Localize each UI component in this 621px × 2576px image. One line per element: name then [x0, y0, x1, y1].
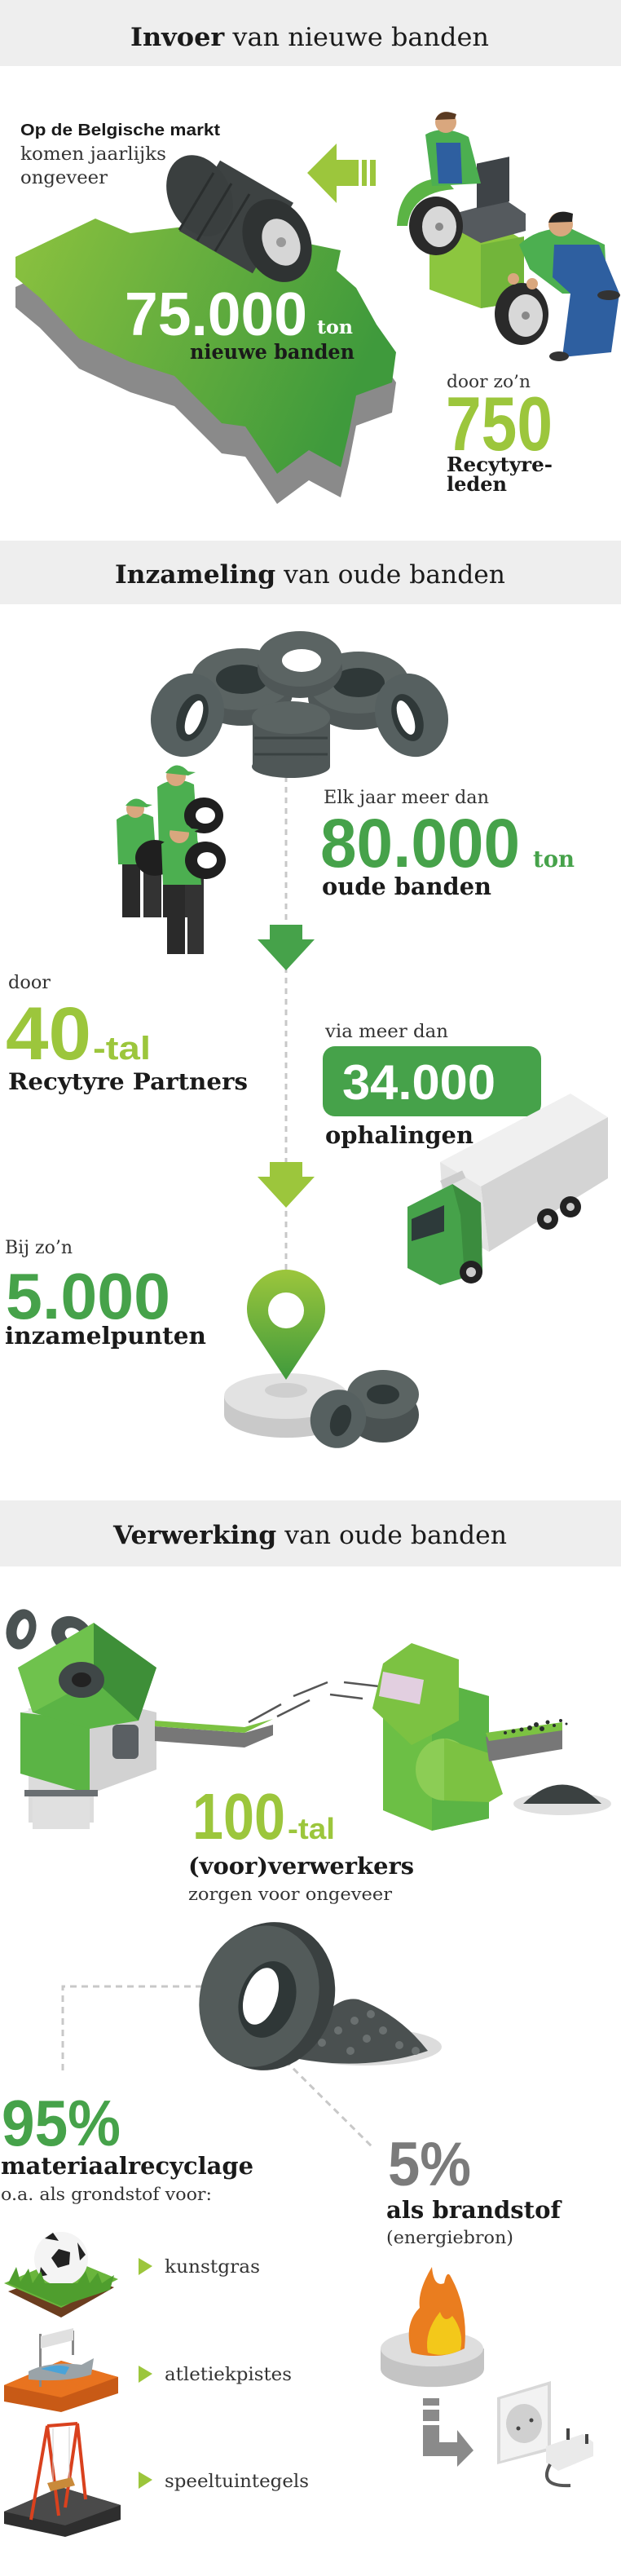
stat: 100-tal verwerkers: 100 [192, 1780, 285, 1853]
illustration: partners holding tires [117, 765, 226, 954]
header: verwerking: Verwerking van oude banden [112, 1521, 507, 1550]
bullet: kunstgras: kunstgras [165, 2257, 260, 2278]
icon: soccer ball on grass [4, 2232, 118, 2318]
icon: fire on platform [381, 2267, 484, 2387]
stat: 80.000 ton oude banden: 80.000 [320, 805, 520, 881]
stat: 40-tal Recytyre Partners: -tal [93, 1031, 151, 1067]
icon: power socket and plug [497, 2381, 593, 2485]
stat: 40-tal Recytyre Partners: door [8, 973, 51, 993]
text: door zo'n 750 Recytyre-leden: 750 [446, 381, 553, 466]
stat: 34.000 ophalingen: via meer dan [324, 1022, 448, 1042]
arrow down light green [258, 1162, 315, 1208]
intro text: ongeveer [20, 168, 108, 188]
illustration: shredder machine left [2, 1606, 156, 1829]
illustration: tire with granulate [181, 1905, 442, 2088]
stat: 40-tal Recytyre Partners: Recytyre Partners [8, 1068, 248, 1095]
tire stack on map [154, 144, 325, 294]
arrow: gray bent arrow [423, 2398, 473, 2467]
stat: 95% materiaalrecyclage: o.a. als grondstof voor: [1, 2185, 212, 2204]
tire pile [139, 631, 460, 778]
icon: athletics track [4, 2328, 118, 2412]
arrow left [307, 144, 376, 203]
stat: 5.000 inzamelpunten: inzamelpunten [5, 1322, 206, 1350]
illustration: granulator right [372, 1643, 611, 1831]
text: door zo'n 750 Recytyre-leden: leden [447, 472, 507, 496]
dashed connectors [63, 1986, 372, 2147]
stat: 80.000 ton oude banden: Elk jaar meer dan [324, 788, 489, 808]
header: invoer [0, 0, 621, 66]
map of Belgium [15, 219, 396, 504]
stat: 80.000 ton oude banden: ton [533, 846, 575, 873]
big number: 75.000 ton [125, 280, 355, 364]
stat: 40-tal Recytyre Partners [6, 973, 248, 1095]
stat: 34.000 ophalingen: 34.000 [342, 1055, 495, 1110]
header: inzameling: Inzameling van oude banden [115, 560, 505, 590]
text: door zo'n 750 Recytyre-leden [446, 372, 553, 496]
stat: 5.000 inzamelpunten: Bij zo’n [5, 1238, 73, 1258]
illustration: collection point with pin and tires [224, 1270, 419, 1456]
stat: 5.000 inzamelpunten [5, 1238, 206, 1350]
stat: 100-tal verwerkers: -tal [288, 1812, 335, 1845]
icon: playground swing [4, 2424, 121, 2537]
text: door zo'n 750 Recytyre-leden: door zo’n [447, 372, 531, 391]
stat: 5.000 inzamelpunten: 5.000 [6, 1260, 170, 1332]
illustration: truck [407, 1094, 608, 1285]
stat: 5% als brandstof: als brandstof [386, 2196, 563, 2224]
big number: 75.000 ton: ton [317, 316, 353, 338]
big number: 75.000 ton: nieuwe banden [190, 340, 355, 364]
stat: 95% materiaalrecyclage [1, 2087, 253, 2204]
intro text [20, 122, 220, 188]
header: inzameling [0, 541, 621, 604]
big number: 75.000 ton: 75.000 [125, 280, 307, 348]
arrow down dark green [258, 925, 315, 970]
illustration: mechanics with tire machine [397, 112, 620, 361]
intro text: komen jaarlijks [20, 144, 166, 165]
intro text: Op de Belgische markt [20, 122, 220, 139]
bullet: atletiekpistes: atletiekpistes [165, 2365, 292, 2385]
stat: 80.000 ton oude banden: oude banden [322, 873, 491, 900]
stat: 40-tal Recytyre Partners: 40 [6, 992, 91, 1076]
stat: 100-tal verwerkers: zorgen voor ongeveer [188, 1885, 393, 1904]
bullet: speeltuintegels: speeltuintegels [165, 2472, 309, 2492]
stat: 95% materiaalrecyclage: 95% [2, 2087, 121, 2159]
stat: 34.000 ophalingen [323, 1022, 541, 1149]
stat: 95% materiaalrecyclage: materiaalrecyclage [1, 2152, 253, 2180]
text: door zo'n 750 Recytyre-leden: Recytyre- [447, 453, 553, 476]
header: verwerking [0, 1500, 621, 1566]
header: invoer: Invoer van nieuwe banden [130, 23, 489, 52]
dashed flow line [285, 776, 287, 1272]
stat: 100-tal verwerkers: (voor)verwerkers [188, 1853, 414, 1880]
stat: 5% als brandstof [386, 2130, 563, 2247]
conveyor with strips [155, 1682, 379, 1748]
stat: 5% als brandstof: 5% [388, 2130, 471, 2199]
stat: 5% als brandstof: (energiebron) [386, 2228, 513, 2247]
stat: 100-tal verwerkers [188, 1780, 414, 1904]
stat: 80.000 ton oude banden [320, 788, 575, 900]
stat: 34.000 ophalingen: ophalingen [325, 1121, 473, 1149]
